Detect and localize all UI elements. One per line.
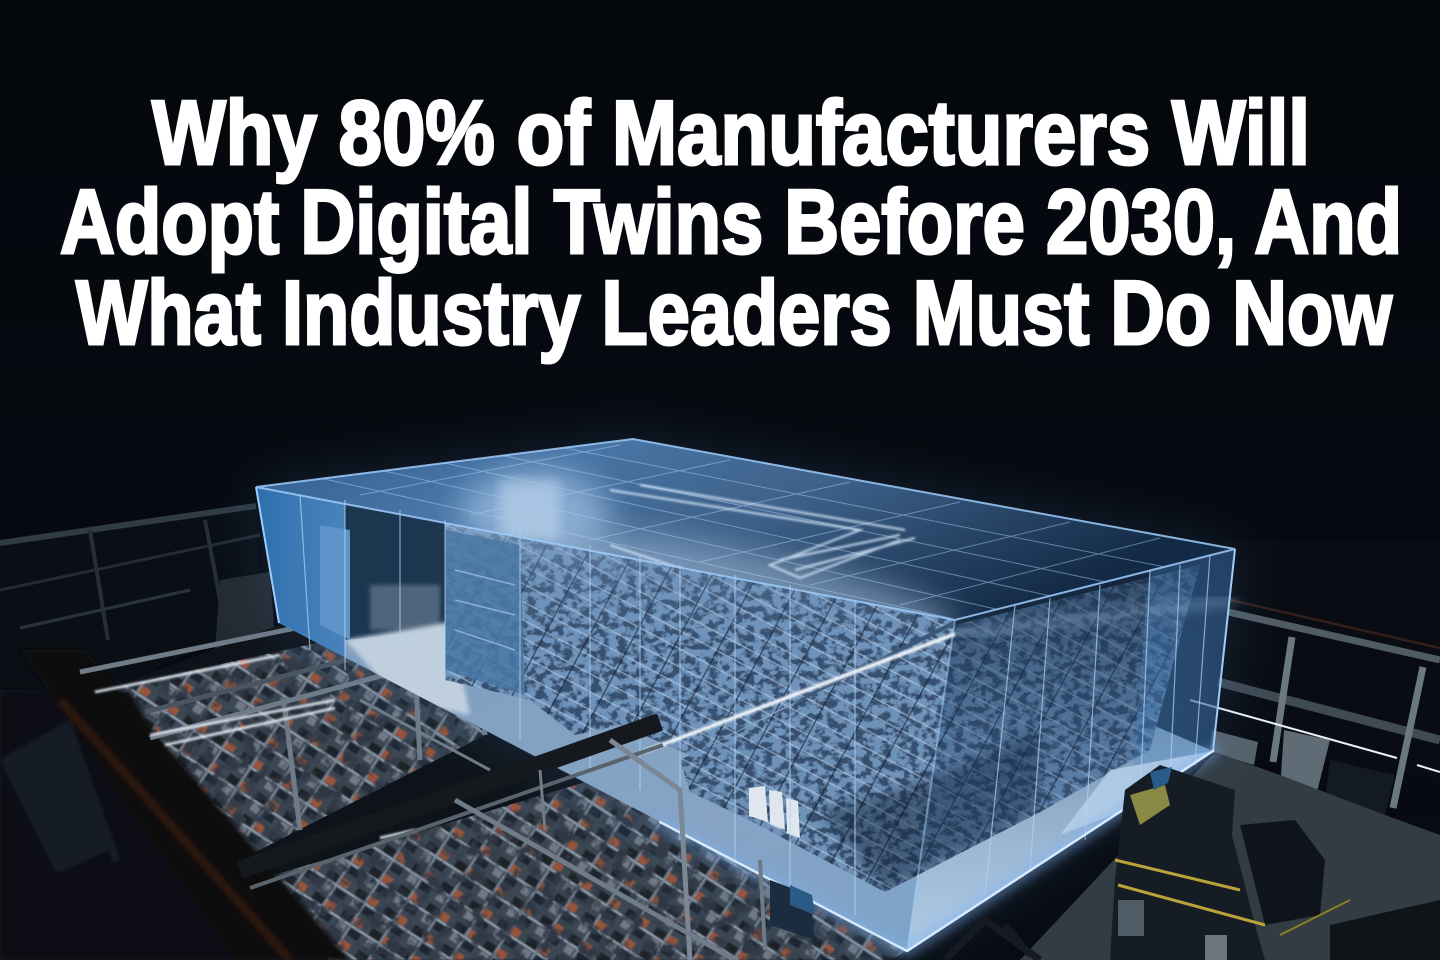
bright light strip xyxy=(643,600,1235,752)
left hall structure xyxy=(0,505,275,690)
dim left bay xyxy=(0,650,350,960)
machine block, front xyxy=(670,560,1210,900)
vertical wall lines xyxy=(300,495,1210,915)
machine block, back xyxy=(430,515,960,760)
top face with grid and pipes xyxy=(258,439,1230,619)
white cabinets xyxy=(749,786,800,838)
machines in front of box edge xyxy=(770,880,815,940)
box edges xyxy=(256,439,1235,951)
overhead light strips xyxy=(95,655,415,838)
glowing base edge xyxy=(660,751,1213,951)
right wall structure xyxy=(1190,540,1440,815)
left wall xyxy=(256,487,955,951)
right wall haze xyxy=(916,550,1234,900)
right floor xyxy=(1020,752,1440,960)
holographic digital twin box xyxy=(240,439,1235,960)
control panel tower xyxy=(445,530,525,695)
glowing floor xyxy=(279,623,1213,951)
truss frames, upper block xyxy=(80,622,490,830)
foreground rig, bottom right xyxy=(945,765,1350,960)
title xyxy=(60,83,1402,364)
glow halo xyxy=(256,439,1235,951)
factory floor with racks, lower left xyxy=(0,620,910,960)
machinery truss over floor xyxy=(240,722,765,960)
